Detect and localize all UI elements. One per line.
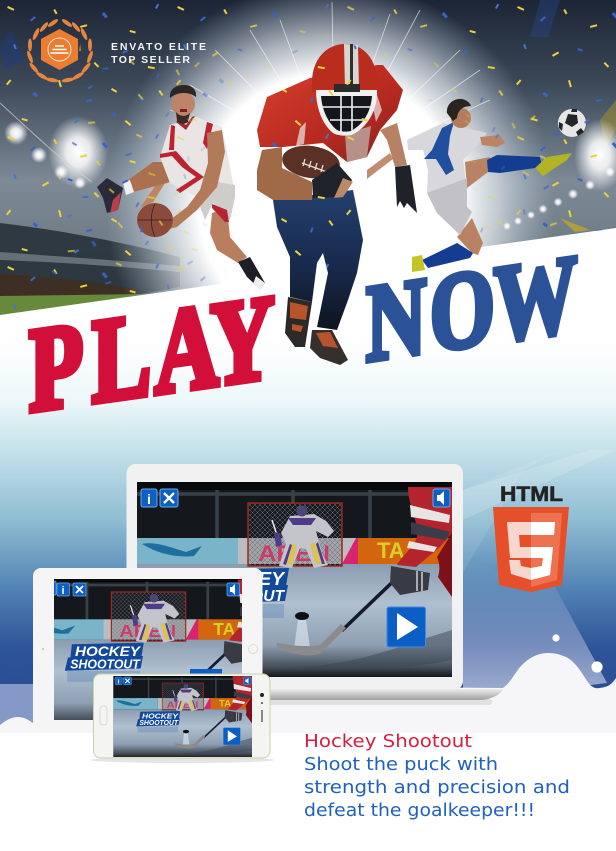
dark wave edge bbox=[0, 668, 33, 684]
label: Envato Elite Top Seller: ENVATO ELITE bbox=[111, 41, 206, 53]
heading: NOW: NOW bbox=[366, 233, 577, 386]
tablet game buttons: i bbox=[61, 585, 65, 597]
panel: lower gradient background with diagonal edge bbox=[0, 228, 616, 851]
stadium crowd stands bbox=[0, 223, 180, 316]
text block: game description: Shoot the puck with bbox=[304, 755, 498, 775]
burst rays bbox=[170, 2, 490, 170]
tablet game buttons bbox=[57, 583, 240, 597]
illustration: soccer player and ball bbox=[367, 99, 586, 272]
device: phone bbox=[90, 674, 274, 763]
device: laptop bbox=[126, 464, 503, 705]
logo: Envato Elite badge bbox=[26, 18, 206, 83]
text block: game description: strength and precision and bbox=[304, 778, 570, 798]
white hill blob bbox=[0, 653, 616, 733]
device: tablet bbox=[33, 568, 262, 725]
illustration: basketball player bbox=[97, 85, 265, 289]
icon: hexagon bbox=[41, 29, 78, 70]
icon: HTML5 shield bbox=[493, 507, 569, 592]
illustration: football player bbox=[257, 44, 417, 365]
icon: laurel wreath bbox=[26, 18, 94, 83]
panel: stadium hero background bbox=[0, 0, 616, 430]
heading: PLAY: PLAY bbox=[29, 270, 274, 437]
text block: game description: Hockey Shootout bbox=[304, 732, 472, 752]
white light burst bbox=[105, 0, 555, 430]
label: Envato Elite Top Seller: TOP SELLER bbox=[111, 54, 190, 66]
blue light streaks bbox=[0, 0, 616, 232]
text block: game description: defeat the goalkeeper!!! bbox=[304, 801, 535, 821]
logo: HTML5 bbox=[493, 483, 569, 592]
label: HTML: HTML bbox=[500, 483, 563, 506]
confetti bbox=[6, 4, 616, 310]
text block: game description bbox=[304, 732, 570, 821]
stadium floodlights bbox=[0, 103, 616, 230]
label: Envato Elite Top Seller bbox=[111, 41, 206, 66]
